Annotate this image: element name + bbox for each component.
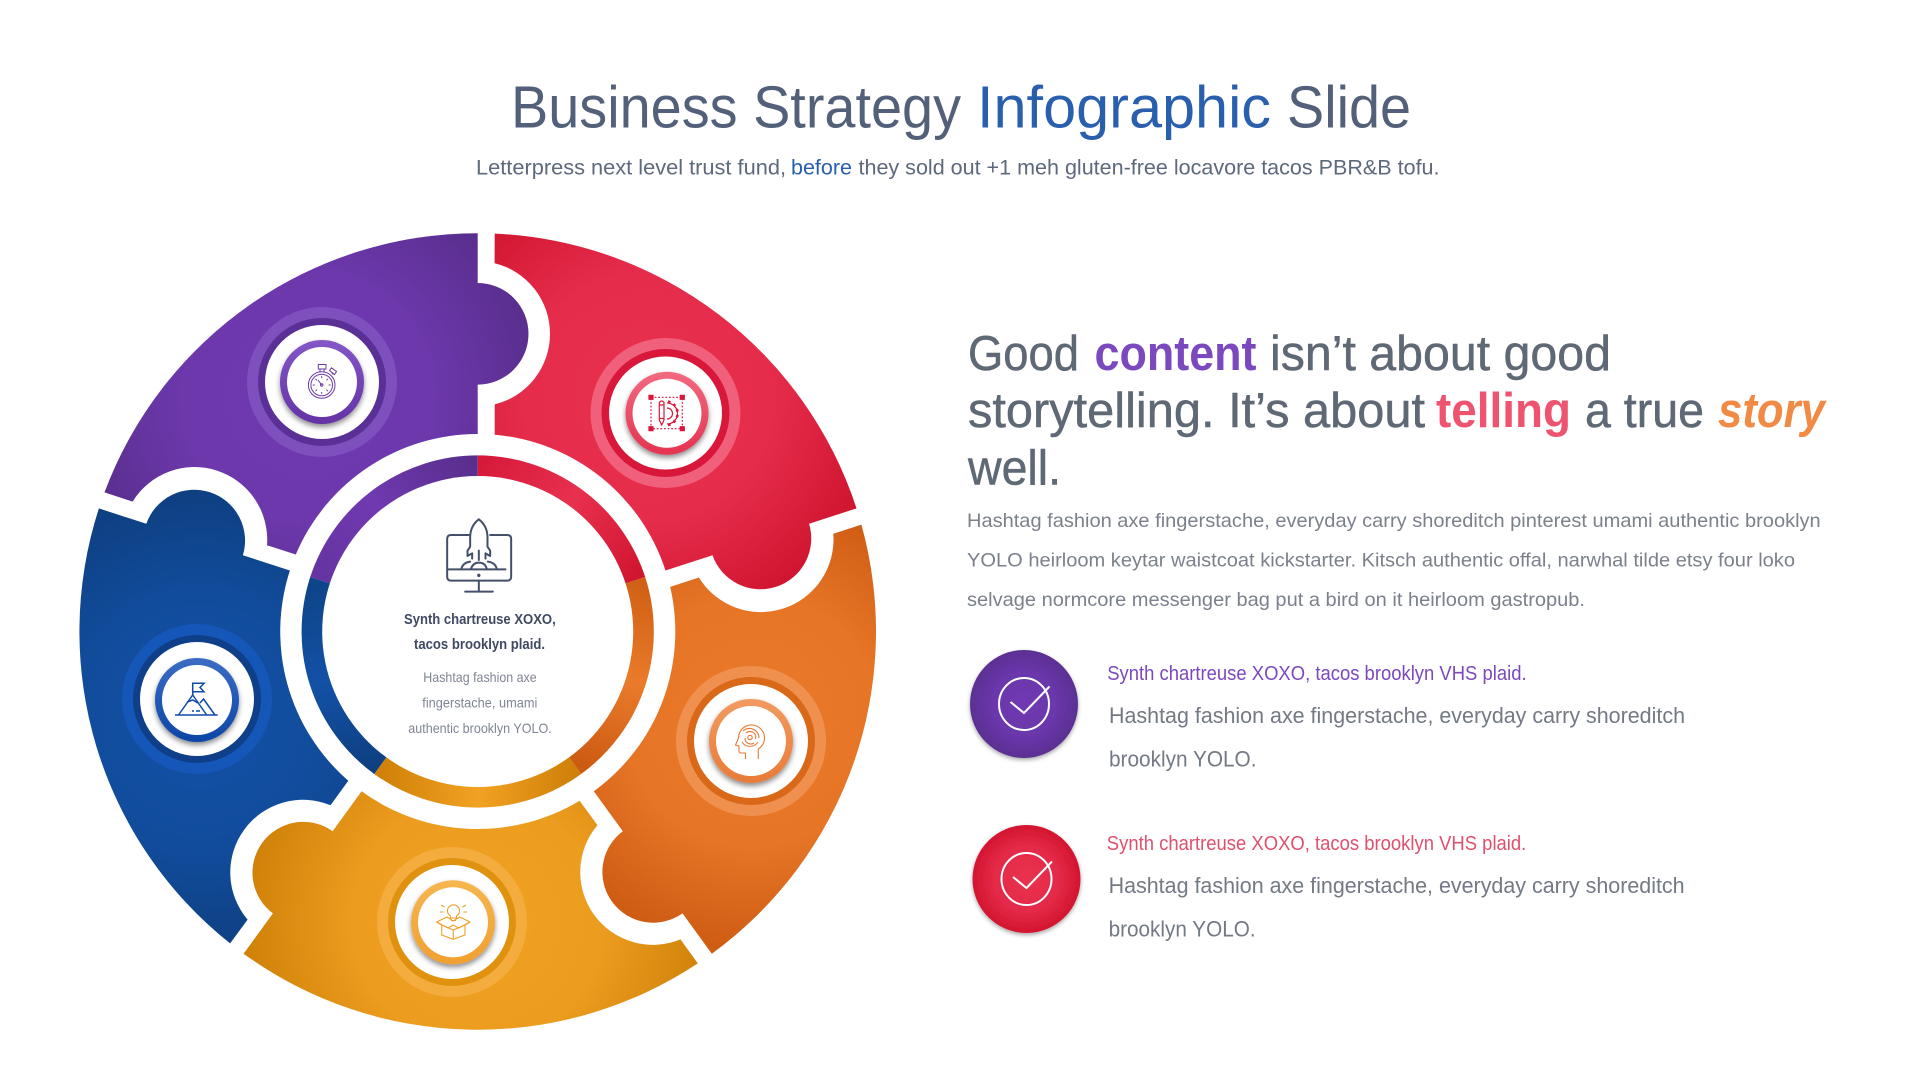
- headline: isn’t about good: [1270, 327, 1611, 381]
- subtitle: they sold out +1 meh gluten-free locavore tacos PBR&B tofu.: [858, 156, 1440, 180]
- center heading: Synth chartreuse XOXO,: [404, 612, 556, 628]
- center heading: [404, 612, 556, 653]
- paragraph: [967, 510, 1821, 611]
- title: Infographic: [977, 74, 1271, 140]
- purple bullet text: brooklyn YOLO.: [1109, 746, 1256, 772]
- paragraph: selvage normcore messenger bag put a bird on it heirloom gastropub.: [967, 589, 1585, 611]
- title: Slide: [1287, 74, 1411, 140]
- headline: storytelling. It’s about: [968, 384, 1425, 438]
- red bullet text: [1107, 832, 1685, 942]
- paragraph: Hashtag fashion axe fingerstache, everyday carry shoreditch pinterest umami authentic brooklyn: [967, 510, 1821, 532]
- icon badge: design gear and pencil: [590, 338, 740, 488]
- purple bullet text: Hashtag fashion axe fingerstache, everyday carry shoreditch: [1109, 703, 1685, 728]
- center body text: Hashtag fashion axe: [423, 669, 537, 685]
- headline: well.: [967, 442, 1061, 496]
- paragraph: YOLO heirloom keytar waistcoat kickstarter. Kitsch authentic offal, narwhal tilde etsy four loko: [967, 550, 1795, 572]
- panel: red puzzle piece: [495, 234, 856, 589]
- subtitle: before: [791, 156, 852, 180]
- purple bullet text: Synth chartreuse XOXO, tacos brooklyn VHS plaid.: [1107, 662, 1527, 685]
- headline: Good: [968, 327, 1079, 381]
- center colored ring: [312, 466, 643, 797]
- subtitle: Letterpress next level trust fund,: [476, 156, 786, 180]
- red bullet text: Synth chartreuse XOXO, tacos brooklyn VHS plaid.: [1107, 832, 1526, 855]
- headline: content: [1094, 327, 1256, 381]
- icon: purple check badge: [970, 650, 1078, 758]
- icon badge: stopwatch: [247, 307, 397, 457]
- headline: story: [1718, 384, 1827, 438]
- panel: gold puzzle piece: [244, 791, 698, 1030]
- title: [511, 74, 1411, 140]
- purple bullet text: [1107, 662, 1685, 772]
- puzzle pieces and center ring: [79, 233, 876, 1030]
- center body text: fingerstache, umami: [422, 694, 537, 710]
- center body text: authentic brooklyn YOLO.: [408, 720, 552, 736]
- panel: blue puzzle piece: [79, 490, 348, 943]
- headline: a true: [1585, 384, 1704, 438]
- icon badge: idea box: [377, 847, 527, 997]
- center heading: tacos brooklyn plaid.: [414, 637, 545, 653]
- center white disc: [322, 476, 633, 787]
- icon: rocket launching from monitor: [447, 519, 511, 592]
- icon badge: head with maze: [676, 666, 826, 816]
- puzzle wheel chart: [79, 233, 876, 1030]
- icon badge: mountain flag: [122, 624, 272, 774]
- headline: telling: [1436, 384, 1571, 438]
- panel: purple puzzle piece: [104, 233, 529, 554]
- headline: [967, 327, 1827, 496]
- red bullet text: brooklyn YOLO.: [1109, 916, 1256, 942]
- title: Business Strategy: [511, 74, 961, 140]
- icon: red check badge: [972, 825, 1080, 933]
- subtitle: [476, 156, 1440, 180]
- center body text: [408, 669, 552, 736]
- red bullet text: Hashtag fashion axe fingerstache, everyday carry shoreditch: [1109, 873, 1685, 898]
- panel: orange puzzle piece: [594, 525, 876, 954]
